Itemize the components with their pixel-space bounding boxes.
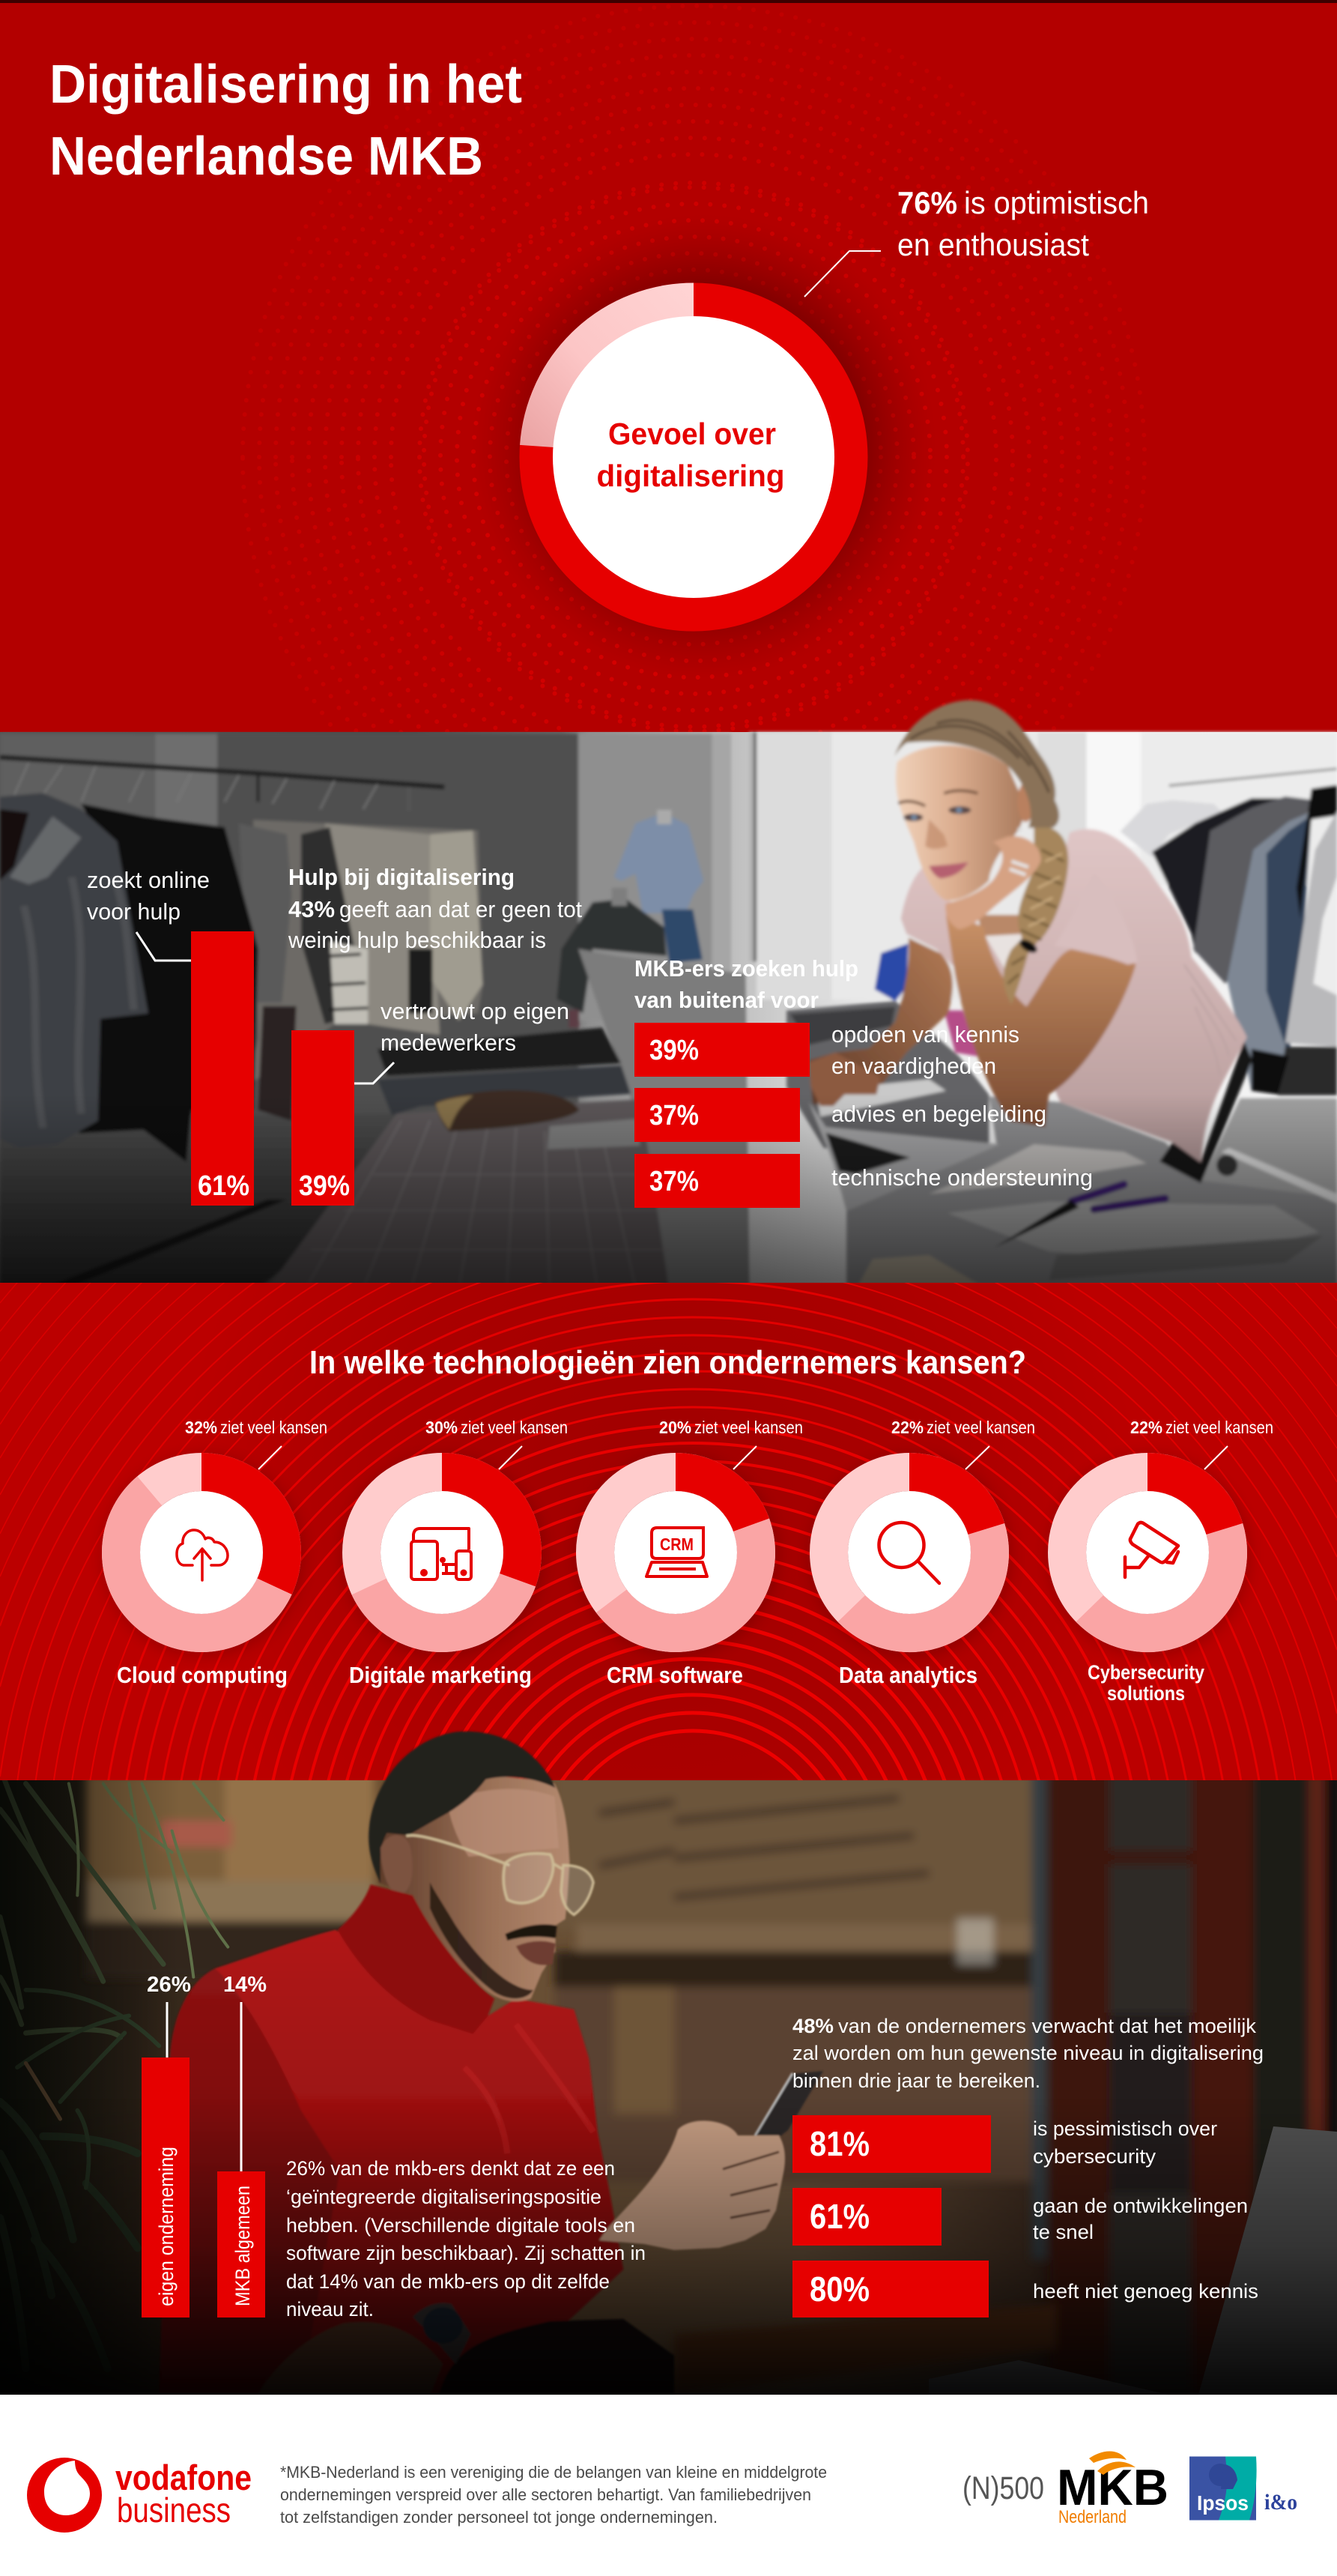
- bar: zoekt online 61%: [191, 931, 254, 1206]
- heading: hulp bij digitalisering: geeft aan dat er geen tot: [339, 896, 582, 922]
- label: 20% ziet veel kansen: [659, 1418, 803, 1469]
- labels: hulp van buitenaf: [831, 1021, 1093, 1191]
- neck and undershirt: [977, 915, 1037, 946]
- mannequin jacket: [557, 898, 667, 1013]
- bar chart: digitaliseringspositie 26% vs 14%: MKB algemeen: [231, 2186, 254, 2306]
- bar chart: redenen: 81%: [810, 2124, 870, 2163]
- heading: mkb-ers zoeken hulp: MKB-ers zoeken hulp: [634, 955, 858, 982]
- bar chart: redenen: 61%: [810, 2197, 870, 2236]
- logo: ipsos: Ipsos: [1197, 2491, 1249, 2515]
- labels: hulp van buitenaf: opdoen van kennis: [831, 1021, 1019, 1047]
- labels: hulp van buitenaf: advies en begeleiding: [831, 1101, 1046, 1127]
- sill: [674, 2304, 1056, 2395]
- hangers: [14, 763, 378, 809]
- label: 30% ziet veel kansen: ziet veel kansen: [461, 1418, 568, 1437]
- label: 20% ziet veel kansen: ziet veel kansen: [694, 1418, 803, 1437]
- label: 22% ziet veel kansen: 22%: [1130, 1418, 1162, 1437]
- label: cybersecurity solutions: Cybersecurity: [1088, 1661, 1204, 1684]
- text block: 26% van de mkb-ers: niveau zit.: [286, 2298, 374, 2320]
- label: 22% ziet veel kansen: [1130, 1418, 1273, 1469]
- turtleneck: [338, 1884, 494, 2034]
- icon: crm laptop: [646, 1528, 707, 1576]
- labels: hulp van buitenaf: en vaardigheden: [831, 1053, 996, 1079]
- trousers: [438, 2319, 674, 2395]
- label: 32% ziet veel kansen: [185, 1418, 327, 1469]
- rail: [1169, 769, 1337, 786]
- label: 22% ziet veel kansen: ziet veel kansen: [1165, 1418, 1273, 1437]
- grey sweater: [0, 793, 148, 1148]
- bar chart: hulp van buitenaf: 39%: [649, 1035, 699, 1066]
- logo: vodafone business: [27, 2458, 252, 2533]
- logo: (N)500: (N)500: [962, 2470, 1044, 2506]
- far arm: [809, 938, 953, 1106]
- bar chart: digitaliseringspositie 26% vs 14%: 14%: [223, 1973, 267, 1997]
- hair: [369, 1732, 556, 1884]
- ear: [381, 1835, 413, 1896]
- footnote: *MKB-Nederland is een vereniging die de belangen van kleine en middelgrote: [280, 2463, 827, 2482]
- label: digitale marketing: Digitale marketing: [349, 1662, 532, 1688]
- face: [896, 746, 1024, 901]
- text block: 26% van de mkb-ers: 26% van de mkb-ers denkt dat ze een: [286, 2157, 615, 2180]
- table back: [786, 1001, 989, 1148]
- heading: in welke technologieen: In welke technologieën zien ondernemers kansen?: [309, 1344, 1026, 1381]
- sleeve: [1055, 873, 1137, 964]
- right part, coordinates from view 785x800: [749, 700, 1337, 1286]
- lower arm: [258, 2322, 443, 2395]
- panel: footer: [0, 2395, 1337, 2576]
- label: 22% ziet veel kansen: 22%: [891, 1418, 924, 1437]
- callout: 76% optimistisch: 76%: [897, 185, 957, 220]
- label: 30% ziet veel kansen: [425, 1418, 568, 1469]
- text block: 26% van de mkb-ers: hebben. (Verschillende digitale tools en: [286, 2214, 635, 2237]
- light garments: [249, 820, 482, 1085]
- label: vertrouwt op eigen medewerkers: vertrouwt op eigen: [381, 998, 569, 1024]
- text block: 26% van de mkb-ers: software zijn beschikbaar). Zij schatten in: [286, 2242, 646, 2264]
- plant: [0, 1780, 229, 2274]
- label: zoekt online voor hulp: zoekt online: [87, 867, 210, 893]
- labels: redenen: is pessimistisch over: [1033, 2117, 1217, 2140]
- footnote: ondernemingen verspreid over alle sectoren behartigt. Van familiebedrijven: [280, 2485, 811, 2504]
- cushion: [435, 1090, 579, 1131]
- callout: 76% optimistisch: is optimistisch: [964, 185, 1149, 220]
- heading: mkb-ers zoeken hulp: [634, 955, 858, 1013]
- laptop: [809, 1102, 1000, 1211]
- donut: digitale marketing: [339, 1449, 545, 1656]
- footnote: [280, 2463, 827, 2527]
- hand holding phone: [755, 2071, 823, 2143]
- label: 30% ziet veel kansen: 30%: [425, 1418, 458, 1437]
- heading: hulp bij digitalisering: [288, 864, 582, 953]
- bar chart: digitaliseringspositie 26% vs 14%: 26%: [147, 1973, 191, 1997]
- text block: 48% van de ondernemers: 48%: [792, 2015, 834, 2037]
- leader line: zoekt online: [136, 932, 191, 961]
- icon: magnifier: [879, 1523, 939, 1583]
- left part, coordinates from view 1000x750: [0, 734, 749, 1289]
- panel: digitaliseringspositie: [0, 1732, 1337, 2395]
- heading: hulp bij digitalisering: weinig hulp beschikbaar is: [288, 927, 546, 953]
- bar chart: hulp van buitenaf: [634, 1023, 810, 1208]
- photo: atelier scene: [0, 700, 1337, 1289]
- black garments: [79, 804, 258, 1162]
- bar: vertrouwt op eigen medewerkers 39%: [291, 1030, 354, 1206]
- panel: gevoel over digitalisering: [0, 3, 1337, 732]
- shirt: [901, 829, 1247, 1163]
- fabric items: [929, 1144, 1147, 1194]
- text block: 48% van de ondernemers: [792, 2015, 1264, 2092]
- writing sheet: [816, 1079, 946, 1116]
- bar chart: redenen: [792, 2115, 991, 2318]
- donut: cloud computing: [94, 1445, 309, 1660]
- head: [378, 1776, 570, 2001]
- text block: 26% van de mkb-ers: [286, 2157, 646, 2320]
- rail: [0, 758, 444, 787]
- donut chart: gevoel over digitalisering: digitalisering: [596, 459, 785, 493]
- logo: mkb nederland: Nederland: [1058, 2507, 1127, 2527]
- laptop lid: [578, 949, 749, 1289]
- logo: i&o: i&o: [1264, 2490, 1297, 2515]
- scissors: [1072, 1185, 1165, 1209]
- right laptop: [1198, 2126, 1337, 2395]
- labels: redenen: te snel: [1033, 2221, 1094, 2243]
- pants: [1159, 1041, 1252, 1183]
- shelves: [81, 1780, 229, 1886]
- leader line: vertrouwt: [354, 1062, 394, 1083]
- labels: redenen: heeft niet genoeg kennis: [1033, 2280, 1258, 2303]
- man figure: [159, 1732, 823, 2395]
- label: vertrouwt op eigen medewerkers: medewerkers: [381, 1030, 516, 1056]
- donut: cybersecurity solutions: [1047, 1452, 1249, 1656]
- heading: hulp bij digitalisering: 43%: [288, 896, 335, 922]
- label: data analytics: Data analytics: [839, 1662, 977, 1688]
- ear: [1017, 782, 1034, 822]
- labels: hulp van buitenaf: technische ondersteuning: [831, 1164, 1093, 1191]
- text block: 26% van de mkb-ers: dat 14% van de mkb-ers op dit zelfde: [286, 2270, 610, 2293]
- text block: 48% van de ondernemers: binnen drie jaar te bereiken.: [792, 2069, 1040, 2092]
- text block: 26% van de mkb-ers: ‘geïntegreerde digitaliseringspositie: [286, 2186, 601, 2208]
- icon: crm laptop: CRM: [660, 1535, 694, 1554]
- title: Digitalisering in het: [49, 55, 522, 115]
- heading: hulp bij digitalisering: Hulp bij digitalisering: [288, 864, 515, 890]
- label: zoekt online voor hulp: [87, 867, 210, 925]
- text block: 48% van de ondernemers: zal worden om hun gewenste niveau in digitalisering: [792, 2042, 1264, 2064]
- label: cloud computing: Cloud computing: [117, 1662, 288, 1688]
- callout leader line: [804, 251, 881, 297]
- label: crm software: CRM software: [607, 1662, 743, 1688]
- hair: [894, 700, 1059, 828]
- footnote: tot zelfstandigen zonder personeel tot jonge ondernemingen.: [280, 2508, 718, 2527]
- label: cybersecurity solutions: [1088, 1661, 1204, 1705]
- glasses: [406, 1835, 593, 1914]
- bar: vertrouwt op eigen medewerkers 39%: 39%: [299, 1170, 350, 1202]
- heading: mkb-ers zoeken hulp: van buitenaf voor: [634, 987, 819, 1013]
- donut chart: gevoel over digitalisering: [536, 300, 851, 614]
- watch: [413, 2303, 471, 2364]
- labels: redenen: [1033, 2117, 1258, 2303]
- braid: [1004, 826, 1068, 1005]
- table plaid: [267, 1099, 669, 1289]
- donut: crm software: [572, 1449, 779, 1656]
- title: Nederlandse MKB: [49, 127, 483, 187]
- bar chart: hulp van buitenaf: 37%: [649, 1166, 699, 1197]
- panel: hulp bij digitalisering: [0, 700, 1337, 1289]
- text block: 48% van de ondernemers: van de ondernemers verwacht dat het moeilijk: [838, 2015, 1256, 2037]
- label: cybersecurity solutions: solutions: [1107, 1682, 1185, 1705]
- labels: redenen: gaan de ontwikkelingen: [1033, 2195, 1248, 2217]
- blue cloth: [875, 943, 909, 1001]
- icon: devices: [411, 1529, 471, 1579]
- bar: zoekt online 61%: 61%: [198, 1170, 249, 1202]
- hand on chin: [945, 836, 1041, 929]
- photo: man with phone: [0, 1732, 1337, 2395]
- icon: cloud upload: [177, 1530, 228, 1580]
- label: 22% ziet veel kansen: [891, 1418, 1035, 1469]
- logo: vodafone business: business: [117, 2491, 231, 2530]
- fabric rolls: [378, 1028, 621, 1076]
- bar chart: digitaliseringspositie 26% vs 14%: eigen onderneming: [155, 2147, 178, 2306]
- label: vertrouwt op eigen medewerkers: [381, 998, 569, 1056]
- callout: 76% optimistisch: [897, 185, 1149, 262]
- label: 32% ziet veel kansen: 32%: [185, 1418, 217, 1437]
- bar chart: digitaliseringspositie 26% vs 14%: [142, 1973, 267, 2318]
- table right: [846, 1096, 1337, 1286]
- panel: technologieen en kansen: [0, 1283, 1337, 1780]
- near hand: [809, 1053, 880, 1106]
- bar chart: hulp van buitenaf: 37%: [649, 1100, 699, 1131]
- label: 22% ziet veel kansen: ziet veel kansen: [927, 1418, 1035, 1437]
- sweater: [159, 1930, 623, 2395]
- eyes brows lips: [898, 790, 977, 806]
- near arm: [946, 915, 1136, 1127]
- bar chart: redenen: 80%: [810, 2270, 870, 2309]
- label: 32% ziet veel kansen: ziet veel kansen: [220, 1418, 327, 1437]
- label: zoekt online voor hulp: voor hulp: [87, 898, 181, 925]
- label: 20% ziet veel kansen: 20%: [659, 1418, 691, 1437]
- logo: vodafone business: vodafone: [115, 2458, 252, 2497]
- callout: 76% optimistisch: en enthousiast: [897, 227, 1089, 262]
- logo: mkb nederland: MKB: [1057, 2459, 1168, 2516]
- mannequin shirt: [614, 813, 703, 913]
- garments: [1121, 800, 1222, 857]
- labels: redenen: cybersecurity: [1033, 2145, 1156, 2168]
- floor: [1203, 1098, 1337, 1286]
- donut chart: gevoel over digitalisering: Gevoel over: [608, 417, 776, 451]
- donut: data analytics: [809, 1452, 1011, 1656]
- icon: security camera: [1125, 1523, 1178, 1577]
- title: [49, 55, 522, 187]
- column and frames: [1031, 1773, 1046, 2260]
- logo: ipsos: [1189, 2456, 1257, 2521]
